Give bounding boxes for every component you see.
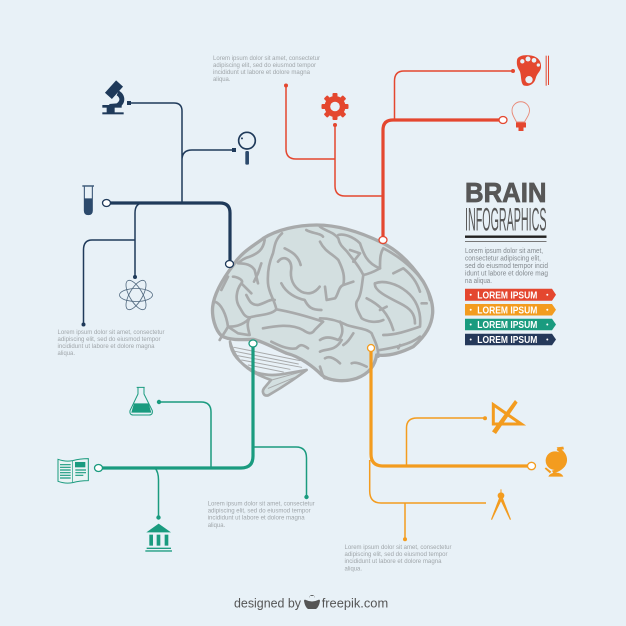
ribbon: green: LOREM IPSUM — [477, 320, 537, 331]
text block: left: Lorem ipsum dolor sit amet, consectetur — [58, 329, 165, 336]
right brain folds — [320, 227, 430, 378]
cerebrum outline — [212, 225, 433, 381]
icon: globe — [545, 447, 567, 477]
red connector lines — [284, 69, 515, 244]
icon: test tube — [82, 185, 94, 215]
icon: gear — [322, 93, 348, 120]
text block: left: incididunt ut labore et dolore magna — [58, 343, 155, 350]
icon: compass — [491, 489, 511, 520]
navy connector lines — [82, 101, 236, 326]
text block: top: adipiscing elit, sed do eiusmod tempor — [213, 62, 317, 69]
text block: orange: Lorem ipsum dolor sit amet, consectetur — [344, 544, 452, 551]
intro paragraph: idunt ut labore et dolore mag — [465, 268, 548, 278]
footer credit: designed by — [234, 596, 301, 610]
text block: left: adipiscing elit, sed do eiusmod tempor — [58, 336, 161, 343]
title: BRAIN — [465, 177, 546, 208]
icon: microscope — [102, 80, 124, 114]
text block: left: aliqua. — [58, 350, 75, 357]
navy end points — [82, 101, 236, 326]
text block: green: aliqua. — [208, 522, 225, 529]
text block: green: adipiscing elit, sed do eiusmod tempor — [208, 508, 311, 514]
ribbon: red: LOREM IPSUM — [477, 290, 537, 301]
intro paragraph — [465, 246, 548, 285]
icon: flask — [130, 387, 152, 415]
text block: green: incididunt ut labore et dolore magna — [208, 515, 305, 522]
text block: green — [208, 500, 315, 529]
red nodes — [379, 116, 507, 244]
orange end points — [403, 416, 487, 541]
icon: palette and brush — [517, 55, 549, 86]
red end points — [284, 69, 515, 127]
intro paragraph: sed do eiusmod tempor incid — [465, 261, 548, 270]
footer credit — [234, 595, 388, 610]
left brain folds — [215, 230, 323, 349]
intro paragraph: consectetur adipiscing elit, — [465, 254, 541, 262]
brain stem and cerebellum — [230, 342, 307, 396]
footer credit: freepik.com — [322, 596, 388, 610]
green nodes — [94, 340, 257, 472]
icon: magnifier — [239, 132, 255, 165]
green end points — [156, 400, 309, 520]
text block: orange: aliqua. — [344, 565, 362, 572]
green connector lines — [94, 340, 309, 520]
orange connector lines — [368, 344, 536, 541]
text block: orange: incididunt ut labore et dolore magna — [344, 558, 442, 565]
title — [465, 177, 546, 242]
text block: orange: adipiscing elit, sed do eiusmod tempor — [344, 551, 448, 558]
text block: top: incididunt ut labore et dolore magna — [213, 69, 310, 76]
text block: green: Lorem ipsum dolor sit amet, consectetur — [208, 500, 315, 508]
text block: top — [213, 55, 321, 83]
navy nodes — [102, 200, 234, 268]
intro paragraph: Lorem ipsum dolor sit amet, — [465, 246, 543, 255]
ribbon: navy: LOREM IPSUM — [477, 335, 537, 346]
icon: set square and ruler — [492, 400, 521, 434]
text block: top: Lorem ipsum dolor sit amet, consectetur — [213, 55, 321, 62]
intro paragraph: na aliqua. — [465, 276, 492, 285]
icon: freepik logo — [304, 595, 320, 609]
text block: orange — [344, 544, 452, 572]
icon: atom — [120, 277, 152, 313]
ribbon labels — [465, 289, 556, 346]
text block: top: aliqua. — [213, 76, 231, 83]
icon: light bulb — [512, 102, 530, 131]
text block: left — [58, 329, 165, 357]
orange nodes — [368, 344, 536, 470]
icon: classical building — [145, 524, 172, 552]
brain illustration — [212, 225, 433, 396]
icon: newspaper — [58, 459, 88, 483]
ribbon: orange: LOREM IPSUM — [477, 305, 537, 316]
